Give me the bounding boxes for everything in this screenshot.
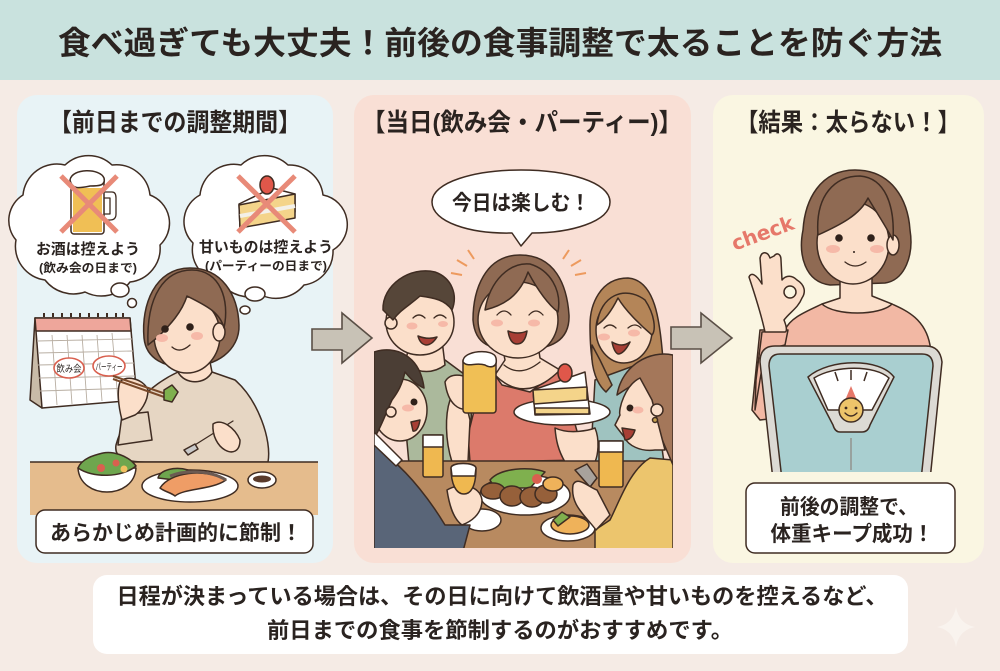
friend: back left man	[383, 271, 472, 475]
salad bowl	[78, 453, 136, 492]
banner: success	[746, 483, 955, 553]
woman with scale	[749, 170, 942, 480]
title banner: 食べ過ぎても大丈夫！前後の食事調整で太ることを防ぐ方法	[58, 25, 942, 61]
salmon plate	[142, 468, 238, 502]
icon: sparkle	[937, 607, 975, 647]
label: limit sweets: 甘いものは控えよう	[199, 239, 333, 256]
glass of beer right	[599, 441, 623, 487]
food platter	[480, 469, 570, 515]
speech bubble: 今日は楽しむ！	[452, 192, 590, 215]
icon: crossed beer	[61, 171, 117, 234]
main woman with beer and cake	[445, 255, 610, 462]
friend: front right woman in yellow	[573, 354, 673, 555]
woman eating a balanced meal	[113, 268, 269, 462]
party table	[398, 434, 646, 548]
party scene	[373, 255, 673, 555]
banner: plan ahead	[36, 510, 313, 553]
sauce dish	[248, 472, 276, 488]
arrow: first to second	[312, 313, 372, 363]
label: until drinking party: (飲み会の日まで)	[39, 260, 137, 275]
summary text box: 日程が決まっている場合は、その日に向けて飲酒量や甘いものを控えるなど、	[116, 584, 888, 609]
panel: before the day	[9, 95, 347, 563]
friend: front left man in suit	[373, 350, 482, 555]
side plate omelet	[541, 512, 595, 541]
thought bubble: limit alcohol	[9, 156, 169, 308]
heading: the party day: 【当日(飲み会・パーティー)】	[362, 109, 682, 137]
calendar label: party: パーティー	[96, 362, 122, 372]
sparkle lines	[451, 250, 586, 275]
calendar label: drinking party: 飲み会	[56, 363, 82, 375]
table with salmon meal	[30, 453, 318, 515]
side plate left	[463, 509, 501, 531]
summary text box	[93, 575, 908, 654]
friend: back right woman	[590, 278, 665, 470]
label: until party: (パーティーの日まで)	[205, 259, 327, 273]
label: limit alcohol: お酒は控えよう	[36, 241, 140, 258]
banner: success: 前後の調整で、	[780, 496, 918, 519]
heading: adjustment period: 【前日までの調整期間】	[49, 109, 301, 137]
arrow: second to third	[671, 313, 732, 363]
speech bubble	[432, 170, 610, 246]
icon: crossed cake	[238, 176, 295, 232]
label: check: check	[728, 210, 798, 255]
title banner	[0, 0, 1000, 80]
banner: success: 体重キープ成功！	[770, 522, 934, 546]
panel: result	[713, 95, 984, 563]
glass of beer	[423, 435, 443, 477]
panel: on the day	[354, 95, 691, 563]
calendar	[30, 313, 137, 408]
banner: plan ahead: あらかじめ計画的に節制！	[50, 522, 302, 545]
heading: result: 【結果：太らない！】	[736, 109, 960, 137]
summary text box: 前日までの食事を節制するのがおすすめです。	[267, 618, 733, 643]
thought bubble: limit sweets	[184, 156, 347, 314]
hand: OK sign	[749, 253, 804, 410]
bathroom scale	[760, 346, 942, 480]
